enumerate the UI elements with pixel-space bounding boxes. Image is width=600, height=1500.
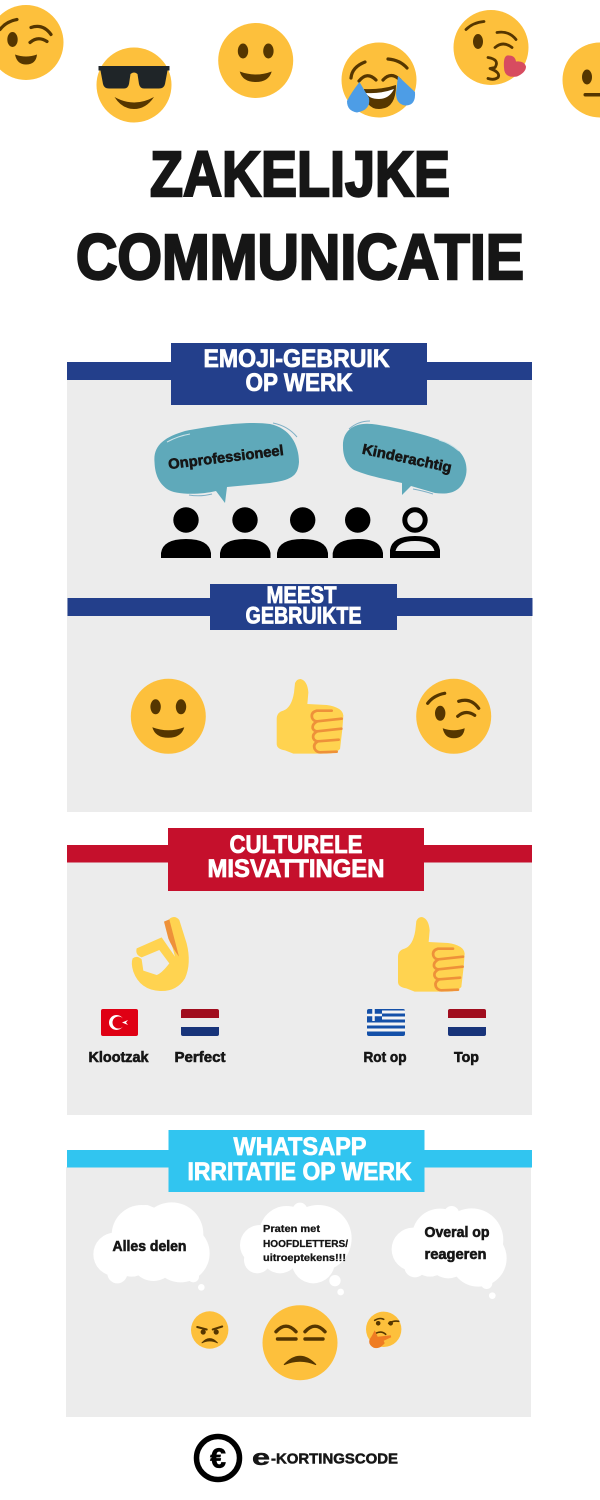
panel: cultural misconceptions [67,862,532,1115]
heading: whatsapp irritatie op werk: WHATSAPP [234,1133,366,1161]
emoji: smile [131,679,206,754]
emoji: thinking face [366,1312,401,1348]
heading: emoji-gebruik op werk: EMOJI-GEBRUIK [204,345,390,373]
emoji: sunglasses [96,48,172,122]
heading: meest gebruikte: MEEST [266,582,337,609]
emoji: smile [218,23,293,98]
thought cloud: overal op reageren: Overal op [424,1225,490,1241]
flag: Netherlands [181,1009,219,1036]
thought cloud: praten met hoofdletters: Praten met [263,1223,321,1235]
label: Rot op: Rot op [364,1050,407,1066]
title: COMMUNICATIE [76,221,524,293]
speech bubble: kinderachtig [343,421,467,495]
label: Klootzak: Klootzak [88,1050,149,1066]
speech bubble: kinderachtig: Kinderachtig [361,442,453,476]
logo: e-kortingscode: € [210,1442,226,1474]
emoji: ok hand [132,917,189,991]
logo: e-kortingscode [196,1436,398,1480]
heading: meest gebruikte: GEBRUIKTE [246,602,362,630]
label: Top: Top [454,1050,479,1066]
speech bubble: onprofessioneel: Onprofessioneel [167,443,285,473]
panel: whatsapp irritation [66,1167,531,1417]
speech bubble: onprofessioneel [154,423,299,503]
people icons [161,507,440,558]
thought cloud: praten met hoofdletters: uitroeptekens!!! [263,1252,346,1264]
emoji: wink [0,5,64,80]
flag: Netherlands [448,1009,486,1036]
emoji: wink [416,679,491,754]
emoji: neutral face [562,42,600,118]
title [76,138,524,293]
emoji: thumbs up [277,679,343,754]
flag: Greece [367,1009,405,1036]
heading: culturele misvattingen: MISVATTINGEN [208,855,384,883]
emoji: tears of joy [342,42,416,118]
thought cloud: alles delen: Alles delen [112,1239,186,1255]
heading: whatsapp irritatie op werk: IRRITATIE OP WERK [188,1158,412,1186]
heading: culturele misvattingen: CULTURELE [230,831,362,859]
logo: e-kortingscode: e [252,1445,270,1470]
emoji: angry face [191,1311,228,1349]
thought cloud: praten met hoofdletters [240,1203,352,1295]
thought cloud: praten met hoofdletters: HOOFDLETTERS/ [263,1238,348,1250]
label: Perfect: Perfect [174,1050,226,1066]
logo: e-kortingscode: -KORTINGSCODE [271,1452,398,1468]
heading: whatsapp irritatie op werk [67,1130,532,1192]
heading: meest gebruikte [68,582,532,630]
emoji: thumbs up [398,917,465,992]
flag: Turkey [101,1009,138,1036]
thought cloud: alles delen [93,1202,210,1291]
emoji: unamused face [262,1305,338,1380]
emoji: kiss with heart [454,10,528,85]
heading: emoji-gebruik op werk: OP WERK [246,369,352,397]
heading: culturele misvattingen [67,828,532,891]
thought cloud: overal op reageren [392,1206,507,1299]
title: ZAKELIJKE [150,138,450,210]
thought cloud: overal op reageren: reageren [424,1247,486,1263]
panel: emoji use at work [67,380,532,812]
heading: emoji-gebruik op werk [67,343,532,405]
